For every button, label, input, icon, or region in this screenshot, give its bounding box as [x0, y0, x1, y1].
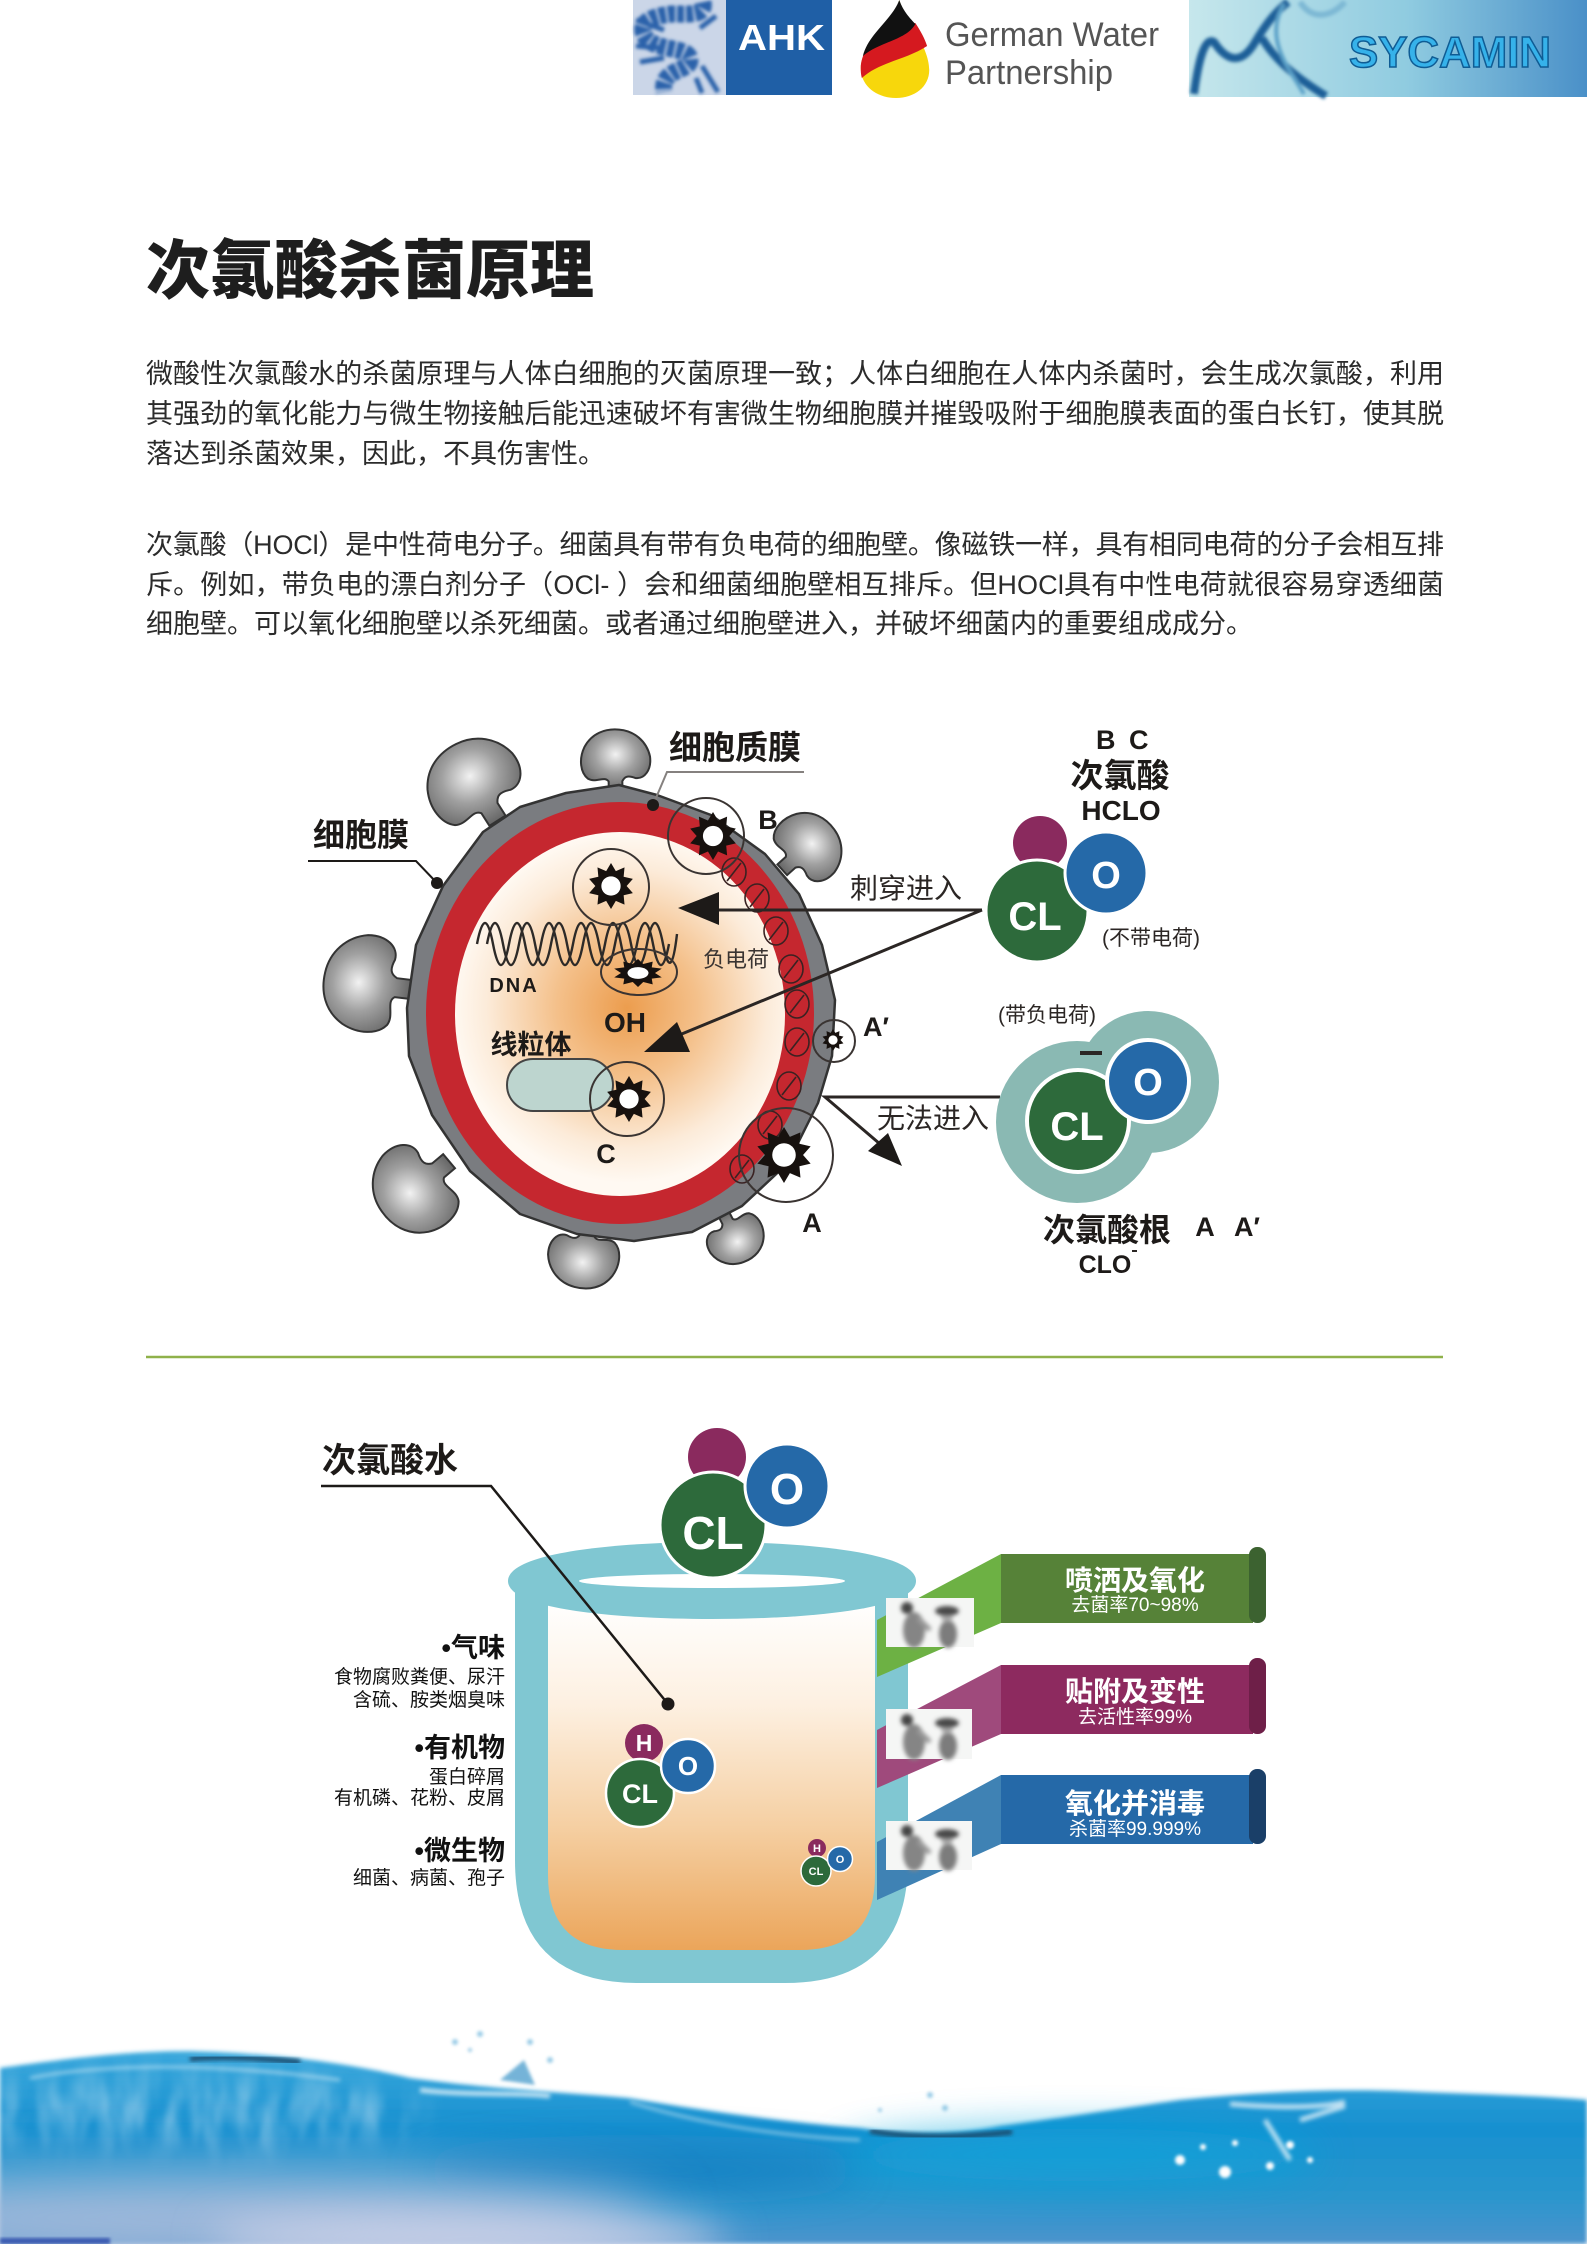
icon: surface protein spikes: [318, 721, 856, 1293]
logo: SYCAMIN: [1189, 0, 1587, 97]
callout: cytoplasmic membrane: 细胞质膜: [669, 729, 801, 766]
panel: adhesion and denaturation: 去活性率99%: [1078, 1706, 1192, 1728]
label: site C: C: [596, 1139, 616, 1169]
logo: AHK: [633, 0, 832, 95]
molecule: HClO: CL: [1008, 895, 1062, 939]
label: DNA: DNA: [489, 975, 539, 997]
molecule: large HClO above the cup: CL: [682, 1507, 744, 1559]
logo: AHK: AHK: [738, 17, 825, 58]
callout: hypochlorous water: 次氯酸水: [322, 1442, 458, 1480]
molecule: large HClO above the cup: [660, 1428, 829, 1578]
cup rim: [508, 1542, 916, 1619]
heading: hypochlorous acid: [1070, 725, 1170, 826]
heading: hypochlorous acid: 次氯酸: [1070, 757, 1170, 794]
label: penetrates: 刺穿进入: [850, 873, 962, 904]
text block: paragraph 2: 次氯酸（HOCl）是中性荷电分子。细菌具有带有负电荷的细胞壁。像磁铁一样，具有相同电荷的分子会相互排: [146, 530, 1444, 560]
text block: odours: [334, 1633, 505, 1711]
text block: paragraph 1: 微酸性次氯酸水的杀菌原理与人体白细胞的灭菌原理一致；人体白细胞在人体内杀菌时，会生成次氯酸，利用: [146, 359, 1444, 389]
heading: hypochlorite: CLO: [1079, 1251, 1131, 1279]
mitochondrion: [507, 1059, 613, 1111]
text block: paragraph 2: 斥。例如，带负电的漂白剂分子（OCl- ）会和细菌细胞壁相互排斥。但HOCl具有中性电荷就很容易穿透细菌: [146, 570, 1444, 600]
molecule: large HClO above the cup: O: [770, 1465, 804, 1514]
cytoplasm: [455, 832, 785, 1196]
heading: hypochlorous acid: C: [1129, 725, 1148, 755]
icon: water drop in German flag colours: [861, 0, 929, 98]
panel: adhesion and denaturation: [877, 1658, 1266, 1788]
heading: hypochlorite: A′: [1234, 1212, 1260, 1242]
DNA helix: [477, 923, 677, 965]
panel: oxidation and disinfection: 杀菌率99.999%: [1069, 1818, 1201, 1840]
heading: hypochlorite: 次氯酸根: [1043, 1212, 1171, 1248]
text block: paragraph 1: [146, 359, 1444, 469]
label: uncharged: (不带电荷): [1102, 927, 1200, 950]
molecule: HClO in water: CL: [622, 1779, 658, 1809]
label: cannot enter: 无法进入: [877, 1103, 989, 1134]
heading: hypochlorite: [1043, 1212, 1260, 1279]
molecule: small HClO in water: CL: [809, 1866, 824, 1878]
text block: organics: [334, 1733, 505, 1809]
label: negatively charged: (带负电荷): [998, 1004, 1096, 1027]
callout: cell membrane: [308, 817, 443, 889]
callout: cell membrane: 细胞膜: [313, 817, 409, 853]
text block: organics: 蛋白碎屑: [429, 1766, 505, 1788]
panel: spraying and oxidation: [877, 1547, 1266, 1677]
cytoplasmic membrane: [426, 802, 814, 1224]
label: site B: B: [758, 805, 778, 835]
title: 次氯酸杀菌原理: [146, 235, 594, 307]
panel: spraying and oxidation: 去菌率70~98%: [1071, 1594, 1199, 1616]
molecule: small HClO in water: O: [836, 1854, 845, 1866]
arrow: horizontal penetration: [678, 892, 982, 925]
label: site A: A: [802, 1208, 822, 1238]
water: [548, 1600, 875, 1950]
molecule: HClO in water: H: [636, 1730, 652, 1756]
molecule: HClO: [986, 816, 1147, 962]
text block: odours: 食物腐败粪便、尿汗: [334, 1666, 505, 1688]
negative charges on the wall: [722, 858, 809, 1183]
callout: hypochlorous water: [321, 1442, 674, 1710]
panel: oxidation and disinfection: 氧化并消毒: [1065, 1788, 1205, 1819]
diagram: bacterial cell: [318, 721, 889, 1293]
logo: German Water Partnership: [861, 0, 1159, 98]
molecule: ClO-: [996, 1011, 1219, 1203]
label: site A prime: A′: [863, 1012, 889, 1042]
text block: odours: 含硫、胺类烟臭味: [353, 1689, 505, 1711]
label: mitochondrion: 线粒体: [490, 1030, 572, 1060]
text block: paragraph 2: [146, 530, 1444, 639]
logo: SYCAMIN: SYCAMIN: [1349, 28, 1551, 77]
heading: hypochlorite: A: [1195, 1212, 1215, 1242]
arrow: repelled: [825, 1097, 1000, 1166]
text block: paragraph 1: 其强劲的氧化能力与微生物接触后能迅速破坏有害微生物细胞膜并摧毁吸附于细胞膜表面的蛋白长钉，使其脱: [146, 399, 1444, 429]
label: negative charge: 负电荷: [703, 947, 769, 972]
molecule: small HClO in water: H: [813, 1843, 821, 1855]
arrow: diagonal penetration: [644, 910, 982, 1052]
label: OH: OH: [604, 1007, 646, 1038]
cup body: [515, 1575, 908, 1983]
text block: organics: 有机磷、花粉、皮屑: [334, 1787, 505, 1809]
text block: paragraph 1: 落达到杀菌效果，因此，不具伤害性。: [146, 439, 605, 469]
text block: microbes: 细菌、病菌、孢子: [353, 1867, 505, 1889]
logo: German Water Partnership: German Water: [945, 16, 1159, 54]
text block: paragraph 2: 细胞壁。可以氧化细胞壁以杀死细菌。或者通过细胞壁进入，并破坏细菌内的重要组成成分。: [146, 609, 1253, 639]
callout: cytoplasmic membrane: [647, 729, 804, 811]
panel: adhesion and denaturation: 贴附及变性: [1065, 1676, 1205, 1707]
molecule: HClO in water: O: [678, 1751, 698, 1781]
molecule: HClO: O: [1091, 855, 1121, 897]
text block: microbes: •微生物: [415, 1836, 505, 1866]
molecule: HClO in water: [606, 1724, 715, 1827]
molecule: small HClO in water: [801, 1839, 852, 1886]
footer: water wave: [0, 2031, 1587, 2244]
text block: microbes: [353, 1836, 505, 1889]
oxidation sites: [573, 798, 855, 1202]
diagram: cup of hypochlorous water: [508, 1542, 916, 1983]
panel: spraying and oxidation: 喷洒及氧化: [1065, 1565, 1205, 1596]
heading: hypochlorous acid: HCLO: [1081, 795, 1161, 826]
text block: odours: •气味: [442, 1633, 505, 1663]
heading: hypochlorous acid: B: [1096, 725, 1116, 755]
molecule: ClO-: O: [1133, 1062, 1163, 1104]
molecule: ClO-: CL: [1050, 1105, 1104, 1149]
text block: organics: •有机物: [415, 1733, 505, 1763]
panel: oxidation and disinfection: [877, 1769, 1266, 1900]
logo: German Water Partnership: Partnership: [945, 54, 1113, 92]
cell wall: [407, 785, 835, 1241]
